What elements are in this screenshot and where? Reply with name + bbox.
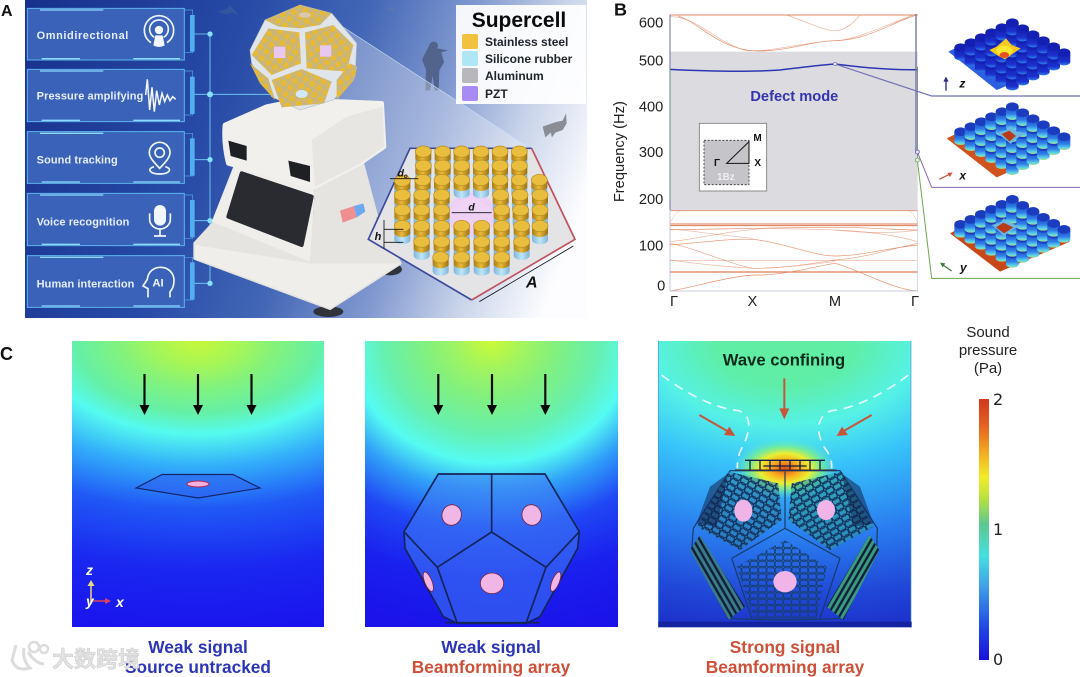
dodecahedron array: [404, 474, 579, 623]
coordinate axes: z: [85, 562, 93, 578]
axis tick labels: 200: [639, 192, 663, 208]
supercell dodecahedron: [250, 5, 357, 110]
colour bar labels: 2: [993, 390, 1003, 409]
icon: sound wave: [146, 79, 176, 112]
Brillouin zone inset: M: [753, 133, 762, 144]
dimension labels: d: [468, 203, 475, 214]
mode label y: [940, 261, 968, 275]
card: Pressure amplifying: Pressure amplifying: [37, 90, 143, 102]
label A: A: [1, 3, 13, 20]
watermark: 大数跨境: [52, 647, 140, 672]
axis tick labels: 600: [639, 16, 663, 32]
resonator faces: [690, 472, 879, 620]
legend: Supercell: PZT: [485, 87, 508, 101]
feature cards column: [27, 8, 298, 307]
axis tick labels: 300: [639, 145, 663, 161]
colour scale title: [959, 324, 1017, 377]
legend: Supercell: Silicone rubber: [485, 52, 573, 66]
incident arrows: [140, 374, 256, 415]
dimension labels: o: [404, 174, 408, 180]
panel C2: weak signal, beamforming array: [365, 341, 618, 677]
coordinate axes: [85, 562, 125, 610]
colour bar labels: 0: [993, 650, 1003, 669]
legend: Supercell: [456, 5, 586, 104]
panel A: robot scene: [1, 0, 587, 318]
pressure field 3: [658, 341, 911, 627]
caption 1: [125, 637, 271, 677]
y axis title: Frequency (Hz): [612, 101, 628, 202]
coordinate axes: y: [85, 593, 95, 609]
colour scale: [959, 324, 1017, 669]
icon: microphone: [150, 205, 170, 236]
card: Human interaction: Human interaction: [37, 278, 135, 290]
panel C1: weak signal, source untracked: [72, 341, 324, 677]
axis tick labels: 500: [639, 54, 663, 70]
colour scale title: Sound: [966, 324, 1010, 341]
axis tick labels: 0: [657, 278, 665, 294]
mode plot z: [948, 18, 1070, 90]
supercell inset: [368, 146, 575, 302]
panel B: band structure: Γ: [670, 294, 678, 310]
card: Sound tracking: Sound tracking: [37, 154, 118, 166]
dimension labels: h: [375, 231, 382, 243]
mode connectors: [833, 62, 1080, 278]
silhouettes: birds, person, dog: [217, 5, 567, 137]
defect mode band: [670, 64, 918, 71]
mode label z: [943, 77, 965, 91]
mode plot y: [950, 195, 1070, 272]
pressure field 2: [365, 341, 618, 627]
mode plot x: [947, 102, 1070, 177]
caption 2: Beamforming array: [412, 657, 571, 677]
axis tick labels: 400: [639, 100, 663, 116]
mode label x: [939, 168, 967, 182]
card: Pressure amplifying: [27, 69, 195, 122]
panel A background: [25, 0, 587, 318]
wave confining title: Wave confining: [723, 351, 845, 370]
Brillouin zone inset: X: [754, 158, 761, 169]
confinement arrows: [699, 378, 872, 436]
card: Voice recognition: Voice recognition: [37, 217, 130, 229]
colour scale title: (Pa): [974, 360, 1002, 377]
single pentagon plate: [136, 474, 260, 498]
colour bar labels: 1: [993, 520, 1003, 539]
beam of light: [317, 25, 530, 239]
caption 1: Weak signal: [148, 637, 248, 657]
panel B: band structure: [612, 0, 1080, 310]
hot spot: [733, 438, 837, 498]
legend: Supercell: Supercell: [472, 9, 566, 32]
panel B: band structure: M: [829, 294, 841, 310]
card: Sound tracking: [27, 132, 195, 183]
caption 3: Strong signal: [730, 637, 840, 657]
icon: podcast person: [144, 16, 174, 47]
axis tick labels: [639, 16, 665, 294]
mode label y: y: [959, 261, 968, 275]
label C: C: [0, 344, 13, 364]
Brillouin zone inset: 1Bz: [717, 172, 735, 183]
top face comb: [735, 460, 837, 470]
Brillouin zone inset: [699, 123, 767, 191]
caption 3: Beamforming array: [706, 657, 865, 677]
legend: Supercell: Stainless steel: [485, 35, 568, 49]
axis tick labels: 100: [639, 239, 663, 255]
defect mode label: Defect mode: [750, 89, 838, 105]
incident arrows: [433, 374, 550, 415]
icon: location pin: [149, 142, 170, 174]
plot frame: [670, 14, 918, 291]
coordinate axes: x: [115, 594, 125, 610]
robot and insets: [195, 5, 575, 317]
frame and floor: [658, 341, 911, 627]
pressure field 1: [72, 341, 324, 627]
dimension labels: d: [398, 169, 404, 180]
dimension labels: A: [525, 274, 538, 291]
panel C3: strong signal, beamforming array: [658, 341, 912, 677]
dodecahedron frame: [692, 471, 877, 620]
colour scale title: pressure: [959, 342, 1017, 359]
Brillouin zone inset: Γ: [714, 158, 720, 169]
robot: [195, 100, 402, 317]
mode label z: z: [958, 77, 965, 91]
confinement dashed curves: [662, 375, 908, 468]
colour bar: [979, 399, 989, 660]
connector tree: [194, 31, 298, 286]
colour bar labels: [993, 390, 1003, 669]
card: Omnidirectional: Omnidirectional: [37, 30, 128, 42]
mode label x: x: [958, 168, 967, 182]
panel B: band structure: Γ: [911, 294, 919, 310]
band lines: [670, 15, 918, 291]
card: Voice recognition: [27, 193, 195, 246]
caption 2: Weak signal: [441, 637, 541, 657]
card: Human interaction: [27, 256, 195, 307]
PZT discs: [734, 500, 835, 592]
caption 2: [412, 637, 571, 677]
legend: Supercell: Aluminum: [485, 69, 544, 83]
dimension labels: [375, 169, 573, 302]
panel B: band structure: X: [747, 294, 757, 310]
icon: AI head: AI: [152, 278, 164, 290]
band gap shading: [670, 52, 918, 211]
caption 1: Source untracked: [125, 657, 271, 677]
icon: AI head: [143, 267, 174, 297]
caption 3: [706, 637, 865, 677]
watermark: [12, 642, 140, 672]
card: Omnidirectional: [27, 8, 195, 60]
